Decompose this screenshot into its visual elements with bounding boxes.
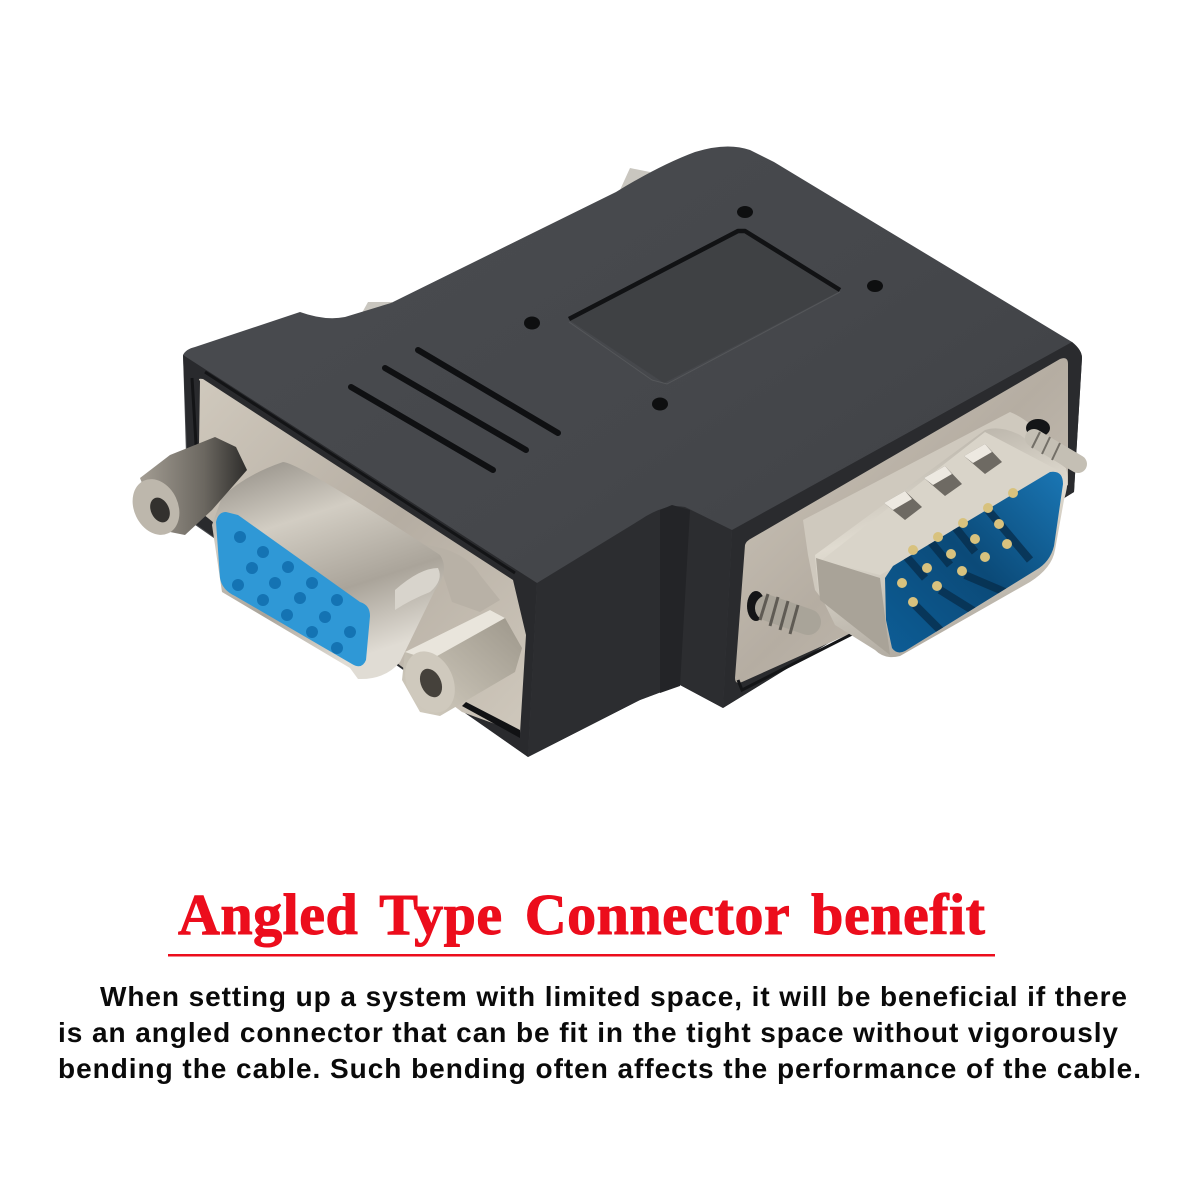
body paragraph: When setting up a system with limited space, it will be beneficial if there [100,981,1127,1012]
blue insert with pins [885,472,1063,652]
infographic canvas [60,146,1140,1084]
left shell [212,462,444,679]
product photo: angled VGA adapter [124,146,1082,757]
left bottom hex standoff [402,610,522,716]
front face: right section [723,342,1082,708]
heading underline [168,954,995,956]
shell [815,428,1068,657]
shell dimples [884,444,1002,520]
right metal plate [735,358,1068,683]
left metal plate [198,379,526,733]
ventilation slots [351,350,558,470]
left top hex standoff [140,437,247,535]
front face: left section [183,355,537,757]
adapter body [183,146,1082,757]
body paragraph: bending the cable. Such bending often affects the performance of the cable. [58,1053,1141,1084]
flange [803,412,1050,620]
rear screws [358,168,650,320]
right connector: VGA male [735,358,1078,690]
thumb screw left [747,591,808,634]
heading: Angled Type Connector benefit: Angled Type Connector benefit [178,882,986,947]
front face: middle section with notch [528,506,732,757]
left shell flange [425,545,500,612]
thumb screw right [1026,419,1078,464]
body paragraph: is an angled connector that can be fit in the tight space without vigorously [58,1017,1118,1048]
left connector: VGA female [124,372,526,738]
blue insert with 15 holes [216,512,370,666]
body paragraph [58,981,1141,1084]
recessed window and holes on top face [524,206,883,410]
